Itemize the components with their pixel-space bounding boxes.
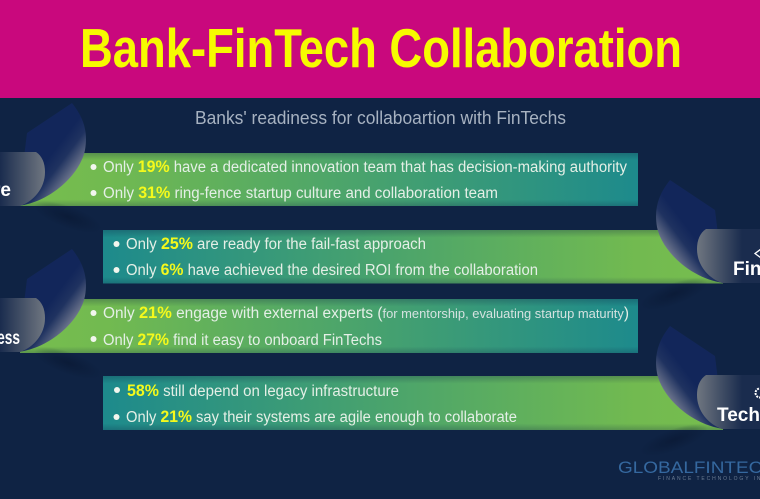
bullets <box>90 304 629 349</box>
panel: fintech <box>103 180 760 317</box>
icon: page curl <box>0 103 86 206</box>
bullets: Only 19% have a dedicated innovation team that has decision-making authority <box>103 158 627 176</box>
bullets: Only 27% find it easy to onboard FinTechs <box>103 331 382 349</box>
icon: page curl <box>656 180 760 283</box>
bullets <box>114 382 517 426</box>
icon: diamond <box>755 249 760 258</box>
panel: technology <box>103 326 760 463</box>
bullets: Only 6% have achieved the desired ROI from the collaboration <box>126 261 538 279</box>
title banner <box>0 0 760 98</box>
panel: culture <box>0 103 638 240</box>
bullets: 58% still depend on legacy infrastructure <box>127 382 399 400</box>
bullets: Only 21% say their systems are agile enough to collaborate <box>126 408 517 426</box>
logo: GLOBALFINTECH <box>618 458 760 477</box>
subtitle: Banks' readiness for collaboartion with FinTechs <box>195 108 566 128</box>
panel: business <box>0 249 638 386</box>
bullets <box>90 158 627 202</box>
bullets: Only 21% engage with external experts (for mentorship, evaluating startup maturity) <box>103 304 629 322</box>
bullets: Only 31% ring-fence startup culture and collaboration team <box>103 184 498 202</box>
bullets <box>114 235 538 279</box>
icon: gear <box>756 388 760 398</box>
icon: page curl <box>656 326 760 429</box>
icon: page curl <box>0 249 86 352</box>
bullets: Only 25% are ready for the fail-fast approach <box>126 235 426 253</box>
